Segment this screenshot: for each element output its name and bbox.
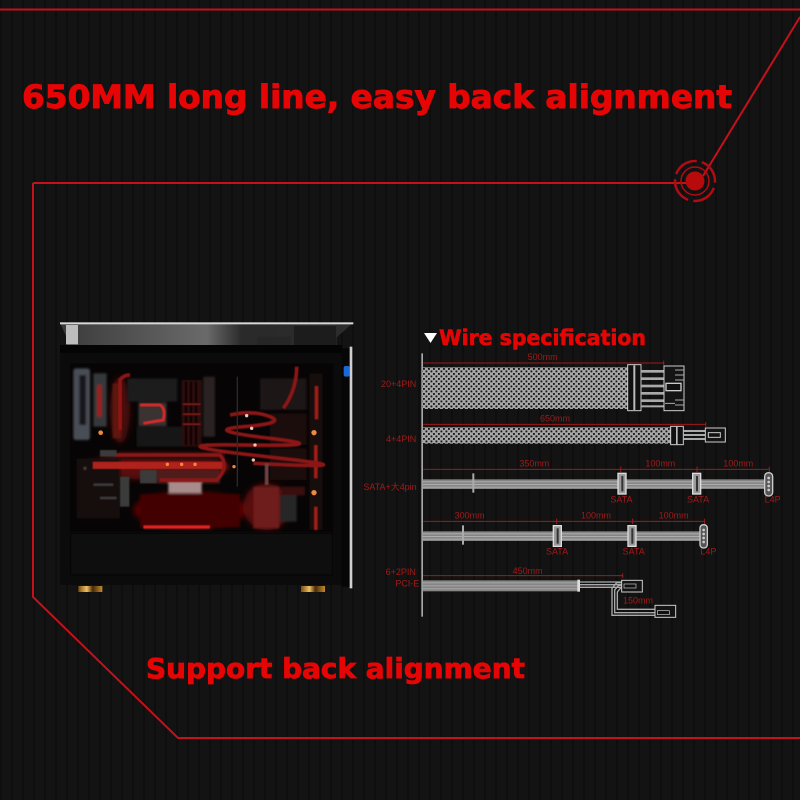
cable: 6+2PIN PCI-E bbox=[386, 566, 676, 617]
heading: wire specification: Wire specification bbox=[439, 326, 646, 350]
cable: SATA second line bbox=[423, 511, 716, 557]
side edge bbox=[342, 347, 352, 588]
cable: 20+4PIN: 20+4PIN bbox=[381, 379, 416, 389]
cable: 6+2PIN PCI-E: 150mm bbox=[623, 595, 653, 605]
cable: 6+2PIN PCI-E: PCI-E bbox=[395, 578, 419, 588]
cable: SATA + 4pin: 100mm bbox=[723, 459, 753, 469]
cable: SATA + 4pin: 350mm bbox=[519, 459, 549, 469]
vertical axis bbox=[421, 353, 423, 617]
cable: 20+4PIN: 500mm bbox=[528, 352, 558, 362]
cable: SATA second line: SATA bbox=[623, 547, 645, 557]
cable: SATA second line: L4P bbox=[700, 547, 716, 557]
cable: SATA + 4pin bbox=[363, 459, 781, 505]
cable: 4+4PIN: 4+4PIN bbox=[386, 434, 416, 444]
caption: support back alignment: Support back alignment bbox=[146, 652, 525, 685]
cable: SATA + 4pin: SATA bbox=[687, 495, 709, 505]
cable: SATA + 4pin: L4P bbox=[765, 495, 781, 505]
top panel bbox=[60, 322, 353, 346]
PSU shroud bbox=[71, 533, 332, 575]
cable: 20+4PIN bbox=[381, 352, 684, 411]
wire diagram bbox=[381, 352, 725, 617]
cable: SATA second line: SATA bbox=[546, 547, 568, 557]
case body bbox=[60, 345, 342, 585]
cable: SATA + 4pin: SATA+大4pin bbox=[363, 481, 417, 492]
cable: SATA + 4pin: SATA bbox=[610, 495, 632, 505]
cable: 4+4PIN: 650mm bbox=[540, 413, 570, 423]
cable: 6+2PIN PCI-E: 450mm bbox=[513, 566, 543, 576]
cable: 6+2PIN PCI-E: 6+2PIN bbox=[386, 567, 416, 577]
gold feet bbox=[78, 586, 325, 592]
cable: 4+4PIN bbox=[386, 413, 725, 445]
title: 650MM long line, easy back alignment bbox=[22, 78, 732, 116]
cable: SATA second line: 300mm bbox=[455, 511, 485, 521]
cable: SATA second line: 100mm bbox=[659, 511, 689, 521]
PC case photo bbox=[60, 322, 353, 592]
icon: target node bbox=[669, 155, 721, 207]
cable: SATA second line: 100mm bbox=[581, 511, 611, 521]
cable: SATA + 4pin: 100mm bbox=[645, 459, 675, 469]
interior components bbox=[73, 367, 324, 530]
